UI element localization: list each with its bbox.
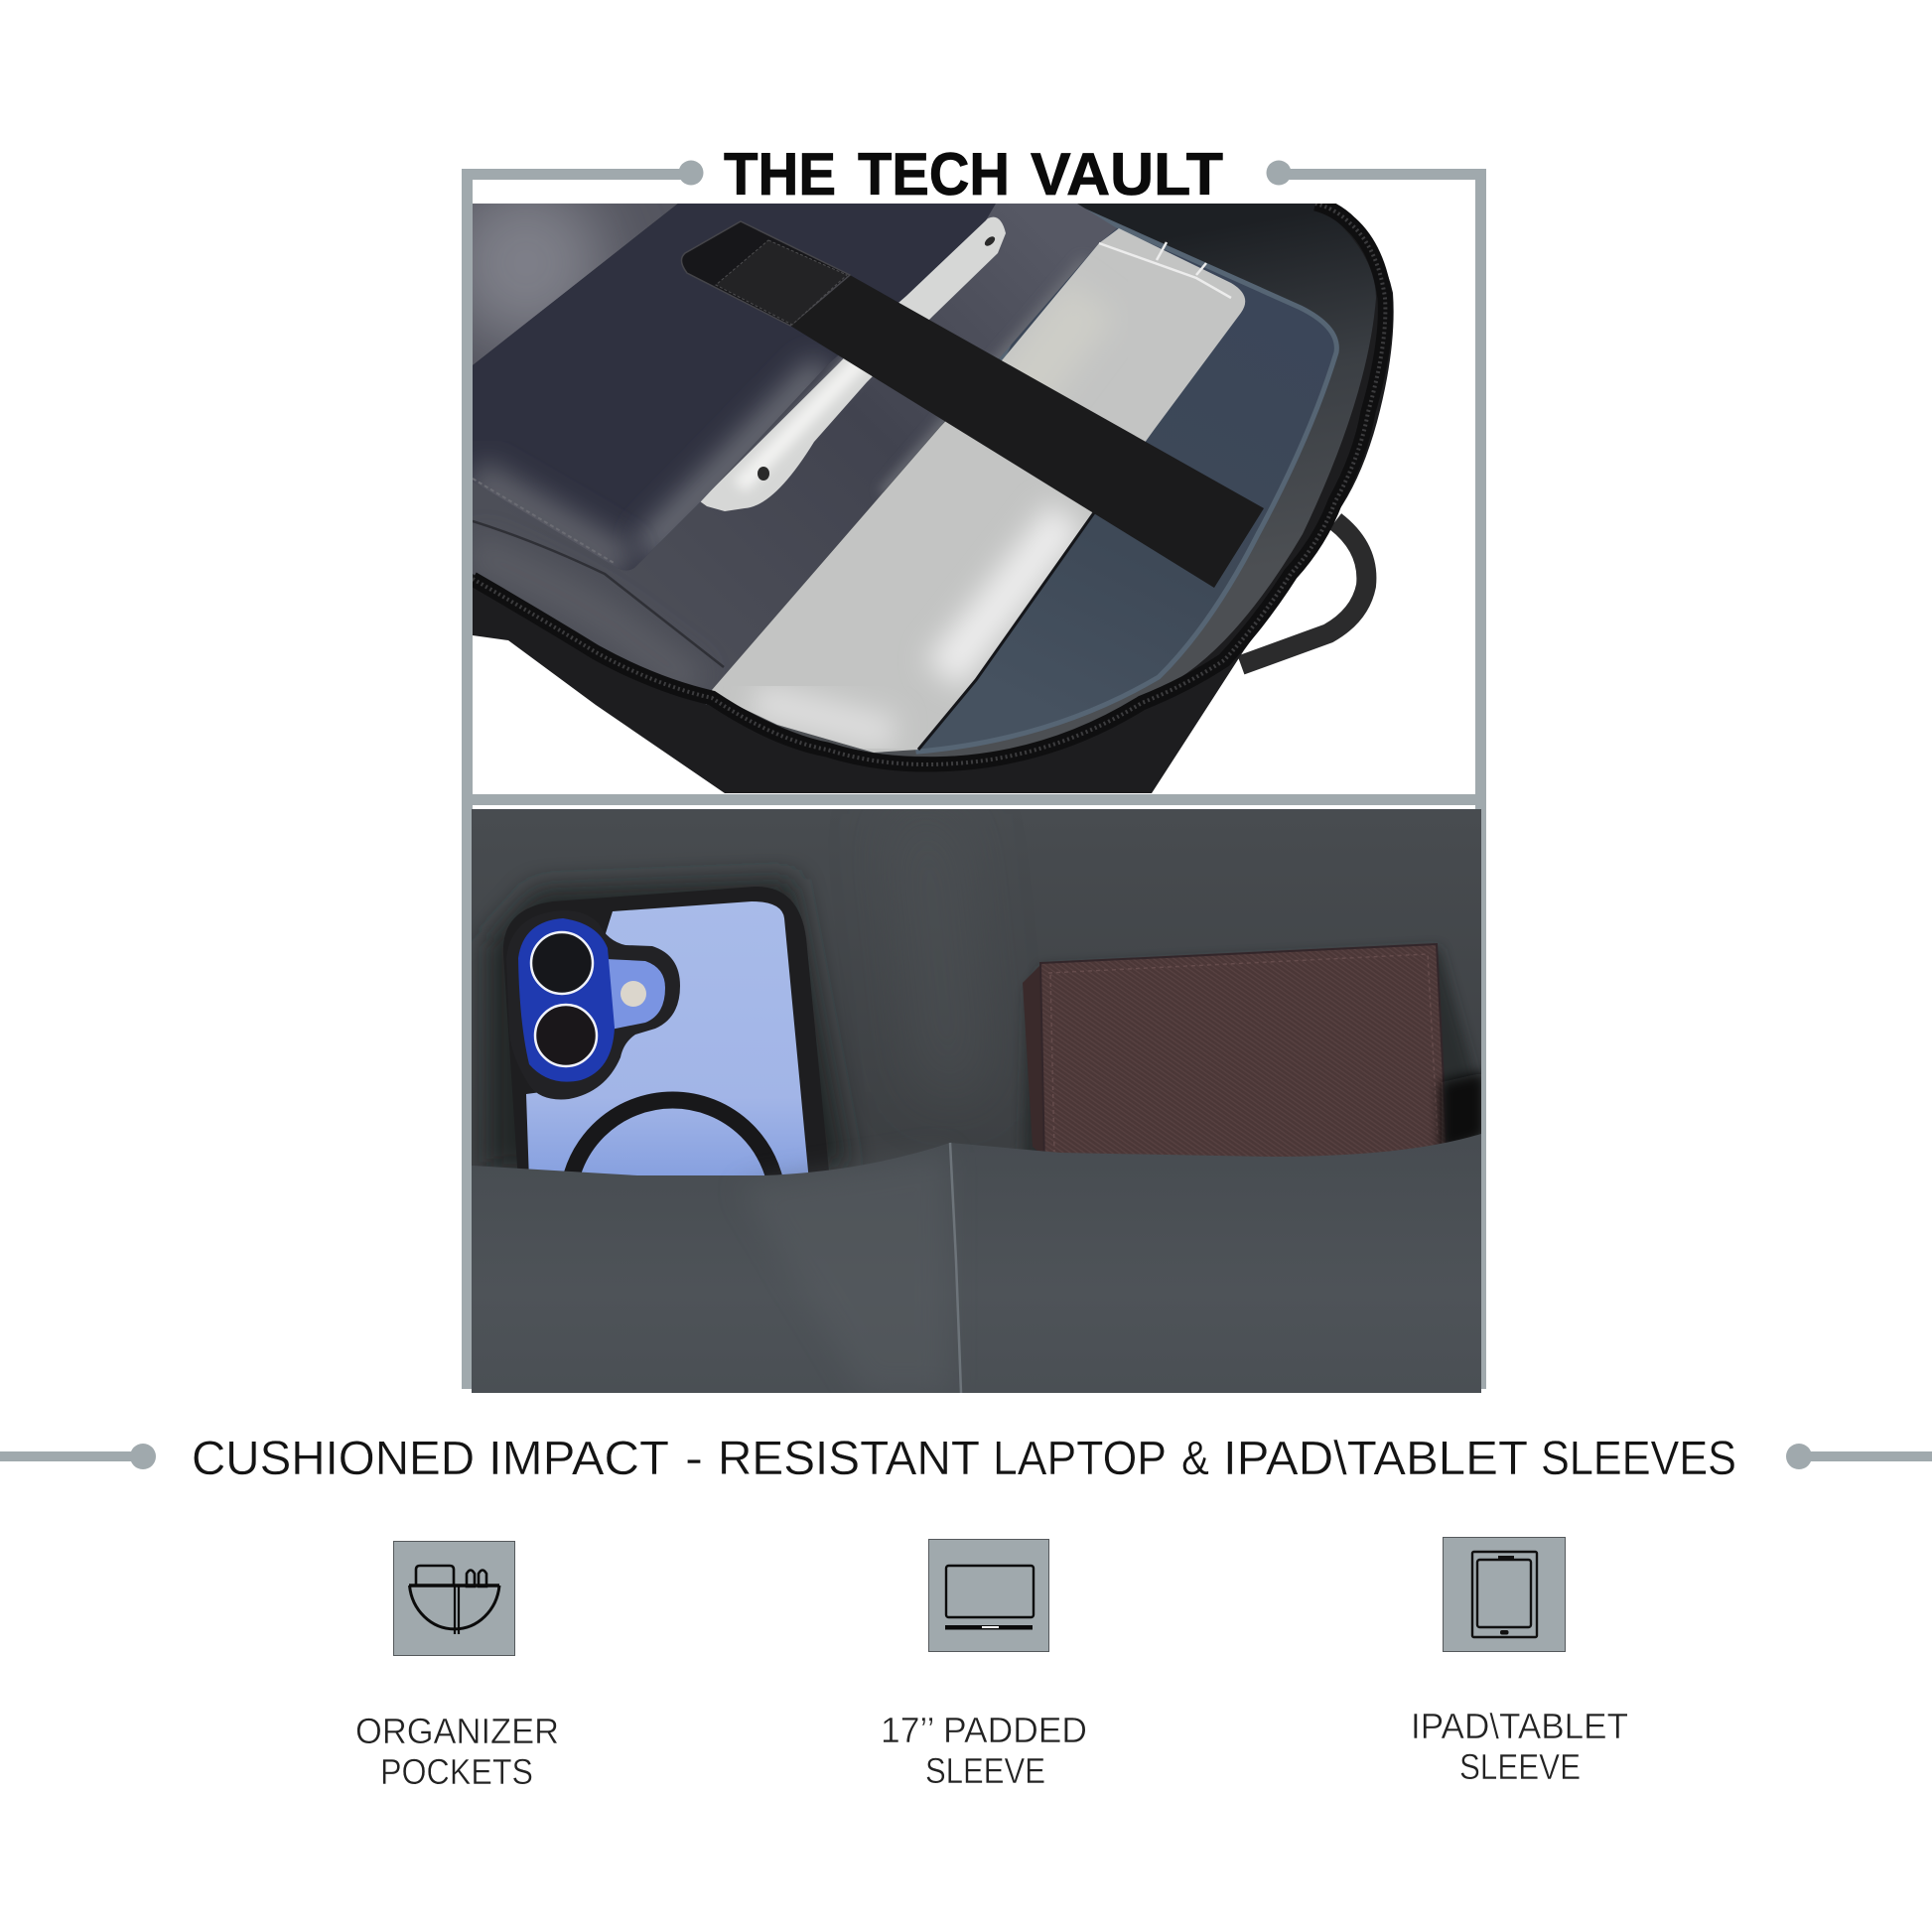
- icon: tablet: [1444, 1537, 1565, 1652]
- panel stitching: [473, 521, 724, 667]
- subtitle: -: [685, 1433, 703, 1485]
- camera island: [518, 918, 680, 1100]
- wallet: [1023, 944, 1447, 1167]
- lens top: [531, 932, 593, 994]
- subtitle: IPAD\TABLET: [1223, 1433, 1528, 1485]
- subtitle: CUSHIONED: [192, 1433, 475, 1485]
- subtitle: LAPTOP: [993, 1433, 1167, 1485]
- label: tablet sleeve: [1411, 1706, 1628, 1787]
- laptop: [695, 218, 1261, 759]
- title: VAULT: [1031, 141, 1223, 207]
- upper lining panel: [473, 204, 677, 365]
- laptop edge: [918, 511, 1095, 750]
- label: organizer pockets: POCKETS: [380, 1751, 533, 1792]
- soft fold highlight: [894, 814, 983, 1092]
- icon: laptop: [929, 1539, 1048, 1652]
- phone case: [503, 887, 830, 1181]
- tablet: [700, 217, 1006, 511]
- shadow around items: [486, 879, 1479, 1172]
- subtitle: IMPACT: [488, 1433, 669, 1485]
- pocket front: [472, 1133, 1484, 1396]
- elastic strap: [681, 221, 1264, 588]
- subtitle: RESISTANT: [718, 1433, 980, 1485]
- fabric folds: [748, 1162, 834, 1175]
- lens bottom: [535, 1005, 597, 1066]
- laptop hinge detail: [1099, 242, 1231, 298]
- flash: [621, 981, 646, 1007]
- lower sleeve panel: [473, 204, 1117, 705]
- label: tablet sleeve: SLEEVE: [1459, 1746, 1581, 1787]
- interior lining: [473, 204, 1376, 757]
- label: tablet sleeve: IPAD\TABLET: [1411, 1706, 1628, 1746]
- wallet stitching: [1048, 954, 1438, 1137]
- icon: organizer pockets: [393, 1541, 514, 1656]
- magnetic ring: [564, 1092, 782, 1175]
- front pocket flap: [473, 204, 999, 581]
- title: [724, 141, 1223, 207]
- crease beside laptop: [712, 246, 1099, 693]
- phone: [503, 887, 829, 1175]
- title: TECH: [858, 141, 1010, 207]
- tablet ports: [758, 234, 997, 481]
- frame: grey bracket around photos: [462, 161, 1486, 1389]
- subtitle connector lines: [0, 1444, 1932, 1469]
- strap leather tab: [681, 221, 850, 326]
- phone back: [526, 901, 809, 1181]
- pocket shadow right: [1442, 1072, 1484, 1152]
- backpack body: [473, 204, 1394, 793]
- label: organizer pockets: [355, 1711, 559, 1792]
- photo: organizer pockets with phone and wallet: [472, 809, 1484, 1396]
- label: padded sleeve: [881, 1710, 1087, 1791]
- label: padded sleeve: SLEEVE: [925, 1750, 1045, 1791]
- label: organizer pockets: ORGANIZER: [355, 1711, 559, 1751]
- pocket stitching: [473, 479, 616, 564]
- subtitle: [192, 1433, 1736, 1485]
- zipper: [473, 204, 1385, 764]
- subtitle: &: [1181, 1433, 1209, 1485]
- subtitle: SLEEVES: [1541, 1433, 1736, 1485]
- title: THE: [724, 141, 836, 207]
- lining backdrop: [472, 809, 1481, 1170]
- label: padded sleeve: 17’’ PADDED: [881, 1710, 1087, 1750]
- carry handle: [1241, 521, 1366, 665]
- photo: laptop and tablet sleeves: [447, 184, 1394, 793]
- padded sleeve: [894, 206, 1336, 752]
- centre seam: [950, 1143, 961, 1393]
